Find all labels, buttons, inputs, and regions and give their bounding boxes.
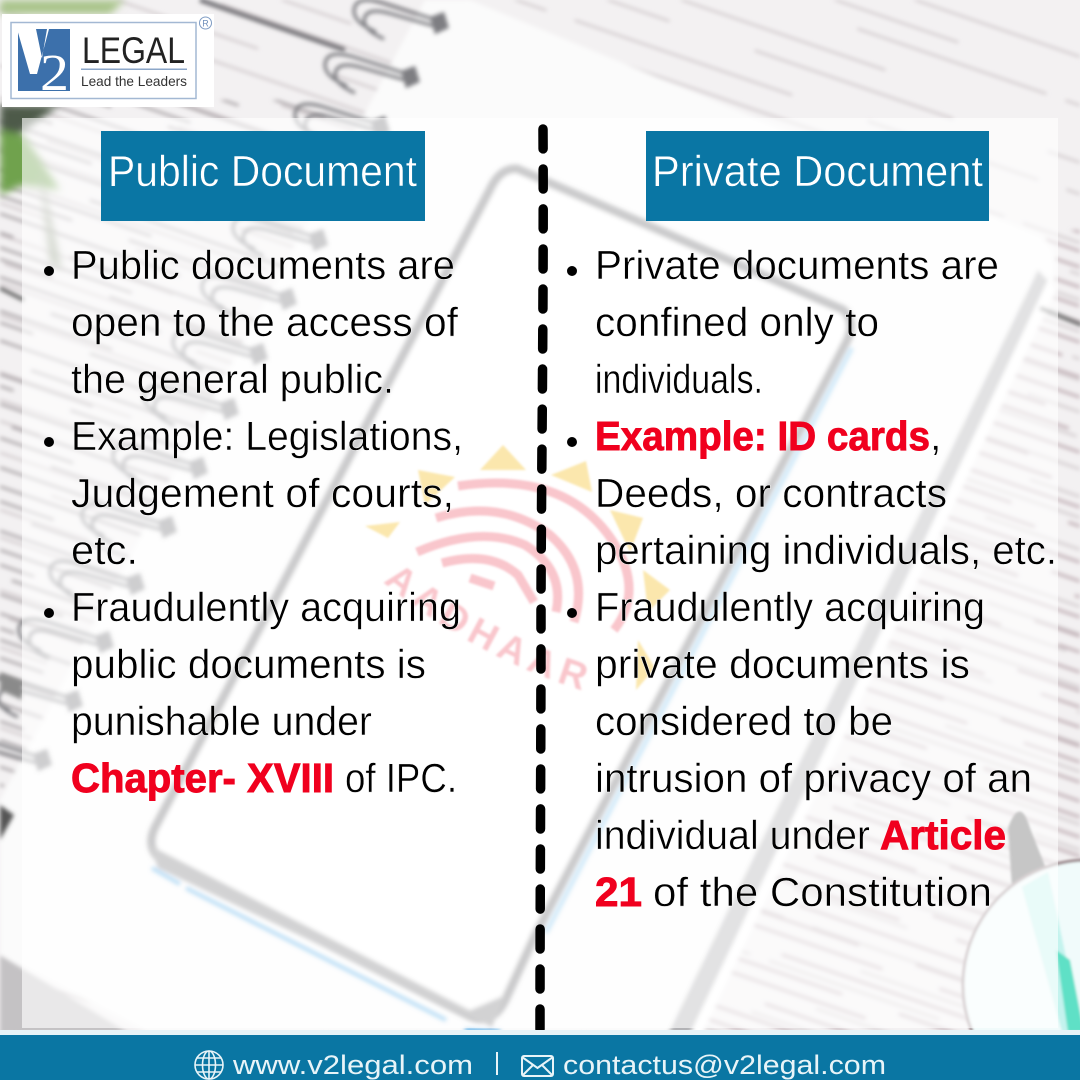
bullet: public penalty: punishable under: [71, 698, 372, 744]
logo mark: V2: 2: [40, 45, 69, 102]
phone right edge glow: [546, 348, 852, 933]
bullet: private penalty: [567, 584, 1032, 915]
notebook shadow bottom-left: [0, 955, 130, 1034]
bullet: public penalty: [44, 584, 461, 801]
registered mark: [200, 17, 212, 29]
watermark word: AADHAAR: [384, 568, 588, 691]
rings: [354, 0, 447, 39]
bullet: public access: the general public.: [71, 356, 394, 402]
bullet: private example: Example: ID cards: [595, 413, 930, 459]
fingerprint arcs: [417, 483, 629, 630]
bullet: public example: etc.: [71, 527, 138, 573]
heading: private document: [646, 131, 989, 221]
bullet: private example: ,: [930, 413, 941, 459]
heading: public document: Public Document: [108, 147, 417, 196]
bullet: public access: open to the access of: [71, 299, 459, 345]
bullet: private example: pertaining individuals, etc.: [595, 527, 1057, 573]
bullet: private penalty: 21: [595, 869, 642, 915]
bullet: public penalty: public documents is: [71, 641, 426, 687]
dashed divider: [540, 129, 543, 1030]
bullet: public penalty: of IPC.: [345, 755, 457, 801]
pen and magnifier: [963, 812, 1080, 1080]
bullet: public example: [44, 413, 463, 573]
bullet: private penalty: individual under: [595, 812, 870, 858]
bullet: public penalty: Chapter- XVIII: [71, 755, 334, 801]
bullet: private example: [567, 413, 1057, 573]
logo card: [2, 14, 214, 107]
sun rays: [365, 445, 670, 690]
dark pen line: [200, 0, 345, 50]
logo wordmark: LEGAL: [82, 30, 185, 71]
icon: envelope: [522, 1056, 553, 1076]
heading: private document: Private Document: [652, 147, 983, 196]
aadhaar watermark logo: [365, 444, 670, 691]
registered mark: R: [202, 18, 209, 28]
bullet: public access: Public documents are: [71, 242, 455, 288]
phone bottom edge: [150, 845, 505, 1027]
website: www.v2legal.com: [232, 1050, 473, 1080]
bullet: public access: [44, 242, 459, 402]
bullet: private penalty: private documents is: [595, 641, 970, 687]
email: contactus@v2legal.com: [563, 1050, 886, 1080]
bullet: private penalty: considered to be: [595, 698, 893, 744]
heading: public document: [101, 131, 425, 221]
panel: public document points: [44, 242, 463, 801]
bullet: private confined: Private documents are: [595, 242, 999, 288]
bullet: private confined: individuals.: [595, 356, 763, 402]
footer bar: [0, 1030, 1080, 1080]
phone: [152, 169, 850, 1019]
bullet: private confined: confined only to: [595, 299, 879, 345]
bullet: private example: Deeds, or contracts: [595, 470, 947, 516]
bullet: public example: Judgement of courts,: [71, 470, 454, 516]
panel: private document points: [567, 242, 1057, 915]
bullet: public penalty: Fraudulently acquiring: [71, 584, 461, 630]
bullet: public example: Example: Legislations,: [71, 413, 463, 459]
plant: [0, 0, 125, 270]
logo tagline: Lead the Leaders: [81, 73, 187, 89]
bullet: private confined: [567, 242, 999, 402]
bullet: private penalty: Article: [880, 812, 1006, 858]
bullet: private penalty: of the Constitution: [653, 869, 992, 915]
bullet: private penalty: intrusion of privacy of an: [595, 755, 1032, 801]
logo mark: V2: [17, 29, 70, 102]
icon: globe: [195, 1051, 223, 1079]
bullet: private penalty: Fraudulently acquiring: [595, 584, 985, 630]
